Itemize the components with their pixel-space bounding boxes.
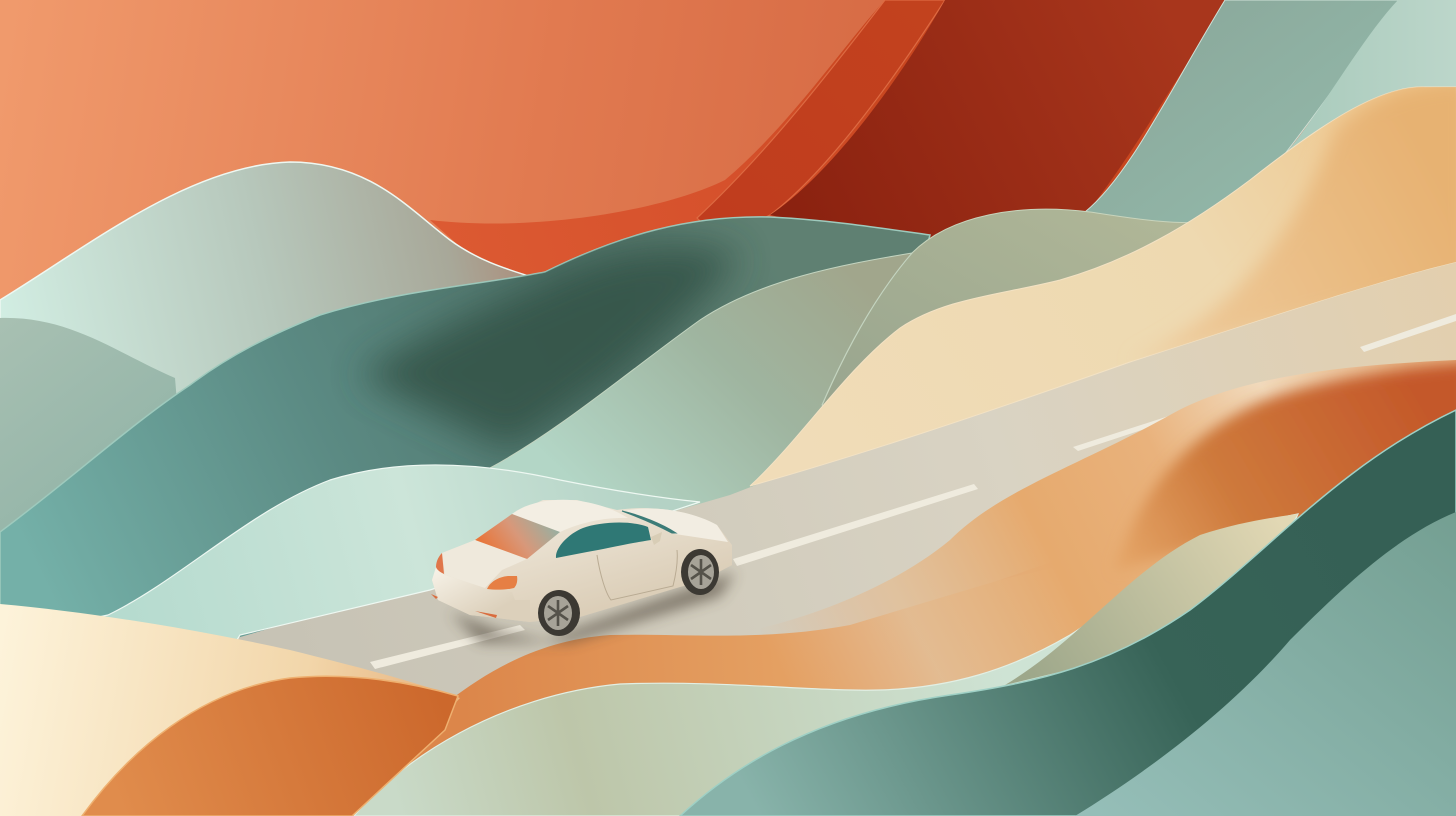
- wave: burnt orange highlight fold: [1115, 362, 1456, 570]
- wave: cream dune bottom left: [0, 604, 460, 816]
- car: rear reflector left: [431, 594, 438, 599]
- road: centre dash far: [1073, 414, 1178, 451]
- wave: pale sage corner hill: [1280, 0, 1456, 200]
- car: side windows: [556, 523, 651, 558]
- road: centre dash mid: [733, 484, 978, 566]
- wave: orange dune right of road: [700, 360, 1456, 720]
- car: [431, 500, 735, 642]
- car: mirror: [651, 532, 662, 545]
- wave: red band: [697, 0, 945, 240]
- car: front wheel: [681, 549, 719, 595]
- wave: pale sage front hill: [354, 514, 1298, 816]
- road surface: [230, 262, 1456, 700]
- car: rear bumper: [432, 567, 530, 622]
- wave: light teal corner hill: [1075, 512, 1456, 816]
- wave: left sage hill: [0, 318, 190, 560]
- wave: dark teal front hill: [680, 410, 1456, 816]
- wave: sage background hill: [1085, 0, 1400, 240]
- wave: sand hill right of road: [750, 87, 1456, 486]
- car: trunk lid: [442, 540, 527, 588]
- wave: orange dune bottom left: [82, 676, 458, 816]
- shadow: dark patch in teal hill: [360, 247, 740, 450]
- car: door seam: [597, 550, 677, 600]
- car: rear wheel: [538, 590, 580, 636]
- car: body side: [432, 500, 732, 622]
- wave: red fold under sky: [430, 0, 1230, 300]
- wave: orange sweep in front of road: [350, 420, 1456, 816]
- car: rear reflector right: [475, 611, 497, 618]
- wave: mint hill upper left: [0, 162, 535, 420]
- wave: dark red fold: [770, 0, 1230, 250]
- car: windscreen sliver: [622, 511, 676, 533]
- car: left tail light: [436, 553, 444, 574]
- wave: teal hill: [0, 217, 930, 640]
- car: right tail light: [487, 576, 517, 590]
- car: bonnet: [625, 509, 728, 542]
- road: centre dash near: [370, 625, 525, 669]
- road: centre dash horizon: [1360, 314, 1456, 352]
- wave: olive mid hill: [490, 253, 912, 520]
- wave: olive sliver right: [1005, 514, 1298, 685]
- wave: sand fold shadow: [1151, 86, 1456, 355]
- wave: mint hill behind car: [0, 465, 700, 700]
- wave: olive upper hill: [820, 209, 1210, 430]
- car: ground shadow: [450, 572, 735, 642]
- car: roof: [512, 500, 628, 532]
- car: rear window: [475, 514, 560, 559]
